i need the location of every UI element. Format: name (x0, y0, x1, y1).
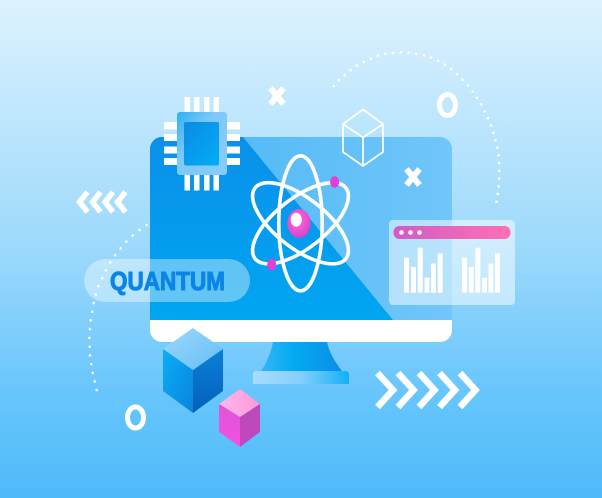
icon: atom (240, 156, 361, 291)
atom nucleus (287, 209, 311, 238)
monitor bezel (150, 320, 452, 342)
window title bar (394, 226, 510, 239)
icon: blue cube (163, 328, 223, 413)
icon: wireframe cube (343, 110, 383, 166)
monitor base (253, 371, 349, 384)
dotted arc: left (89, 224, 148, 390)
label pill: quantum (84, 259, 250, 302)
icon: microchip (164, 97, 240, 190)
bar chart left (404, 248, 443, 293)
panel: bar charts window (389, 220, 515, 305)
icon: ring top right (440, 94, 456, 116)
dotted arc: top right (334, 52, 499, 209)
icon: right chevrons (378, 373, 476, 407)
icon: x mark right (406, 169, 420, 185)
monitor screen (150, 137, 452, 320)
icon: x mark top (270, 88, 284, 104)
electrons (330, 176, 339, 188)
icon: left chevrons (80, 192, 126, 212)
monitor stand (261, 342, 342, 371)
window dots (399, 230, 422, 235)
icon: pink cube (219, 389, 260, 447)
icon: ring bottom left (128, 407, 144, 428)
bar chart right (462, 248, 500, 293)
label pill: quantum: QUANTUM (110, 268, 225, 296)
monitor (150, 137, 452, 384)
